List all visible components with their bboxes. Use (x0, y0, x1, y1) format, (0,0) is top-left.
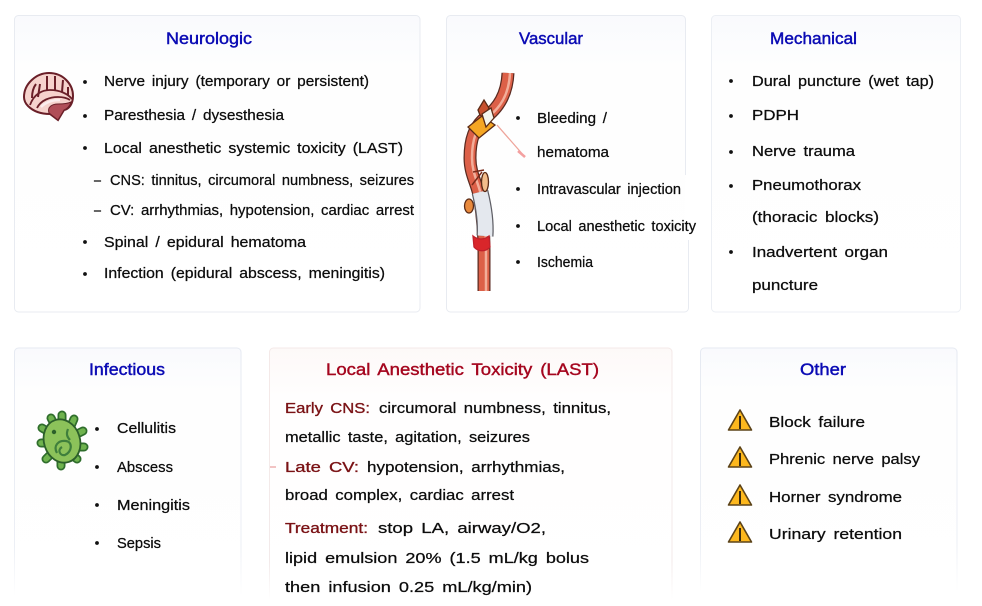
text: early CNS signs: metallic taste, agitation, seizures (285, 429, 530, 446)
list: neurologic complications: Nerve injury (temporary or persistent) (104, 73, 369, 90)
list: mechanical complications (729, 73, 934, 294)
list item: Urinary retention (728, 522, 902, 543)
list: vascular complications (516, 110, 696, 271)
list item: Horner syndrome (728, 485, 902, 506)
list: mechanical complications: Inadvertent organ (752, 244, 888, 261)
list: neurologic complications: Spinal / epidural hematoma (104, 234, 307, 251)
list: neurologic complications: Infection (epidural abscess, meningitis) (104, 265, 385, 282)
list item: Block failure (728, 410, 865, 431)
list: infectious complications: Sepsis (117, 535, 161, 552)
list: neurologic complications: Local anesthetic systemic toxicity (LAST) (104, 140, 403, 157)
list: vascular complications: hematoma (537, 144, 610, 161)
icon: brain (24, 73, 73, 120)
text: late CV signs: broad complex, cardiac arrest (285, 487, 515, 504)
heading: Neurologic: Neurologic (166, 30, 252, 48)
panel: Infectious (14, 348, 241, 596)
text: early CNS signs: circumoral numbness, tinnitus, (379, 400, 611, 417)
list: mechanical complications: PDPH (752, 107, 799, 124)
list item: Block failure: Block failure (769, 414, 865, 431)
list: mechanical complications: (thoracic blocks) (752, 209, 879, 226)
list: vascular complications: Ischemia (537, 254, 594, 271)
text: early CNS signs: Early CNS: (285, 400, 370, 417)
list: infectious complications: Cellulitis (117, 420, 176, 437)
list: mechanical complications: Nerve trauma (752, 143, 856, 160)
text: late CV signs: hypotension, arrhythmias, (367, 459, 565, 476)
icon: green virus (38, 415, 86, 467)
list: mechanical complications: Dural puncture (wet tap) (752, 73, 934, 90)
marker: red dash (270, 466, 276, 468)
list: neurologic complications: CNS: tinnitus, circumoral numbness, seizures (110, 172, 414, 189)
panel: Vascular (446, 16, 696, 312)
list: vascular complications: Intravascular injection (537, 181, 681, 198)
text: late CV signs: Late CV: (285, 459, 359, 476)
list: neurologic complications: – (94, 172, 102, 189)
text: early CNS signs (285, 400, 611, 446)
list: neurologic complications: CV: arrhythmias, hypotension, cardiac arrest (110, 202, 415, 219)
list: vascular complications: Local anesthetic toxicity (537, 218, 696, 235)
icon: blood vessel (464, 73, 525, 291)
list: vascular complications: Bleeding / (537, 110, 608, 127)
text: treatment: stop LA, airway/O2, (378, 520, 546, 537)
list: infectious complications (95, 420, 190, 552)
list item: Phrenic nerve palsy: Phrenic nerve palsy (769, 451, 921, 468)
heading: Mechanical: Mechanical (770, 30, 857, 48)
panel: Mechanical (712, 16, 960, 312)
list: mechanical complications: puncture (752, 277, 818, 294)
panel: Other (700, 348, 957, 592)
panel: Local Anesthetic Toxicity (270, 348, 672, 600)
list: neurologic complications: – (94, 202, 102, 219)
list: infectious complications: Abscess (117, 459, 173, 476)
list: neurologic complications (83, 73, 415, 282)
list item: Phrenic nerve palsy (728, 447, 921, 468)
text: treatment: Treatment: (285, 520, 368, 537)
list: neurologic complications: Paresthesia / dysesthesia (104, 107, 285, 124)
list: mechanical complications: Pneumothorax (752, 177, 862, 194)
panel: Neurologic (14, 16, 420, 312)
text: late CV signs (285, 459, 565, 504)
text: treatment: then infusion 0.25 mL/kg/min) (285, 579, 532, 596)
heading: Infectious: Infectious (89, 361, 165, 379)
heading: Vascular: Vascular (519, 30, 583, 48)
list item: Horner syndrome: Horner syndrome (769, 489, 902, 506)
list item: Urinary retention: Urinary retention (769, 526, 902, 543)
text: treatment: lipid emulsion 20% (1.5 mL/kg bolus (285, 550, 589, 567)
text: treatment (285, 520, 589, 596)
list: infectious complications: Meningitis (117, 497, 190, 514)
heading: Other: Other (800, 361, 847, 379)
heading: Local Anesthetic Toxicity (LAST): Local Anesthetic Toxicity (LAST) (326, 361, 599, 379)
